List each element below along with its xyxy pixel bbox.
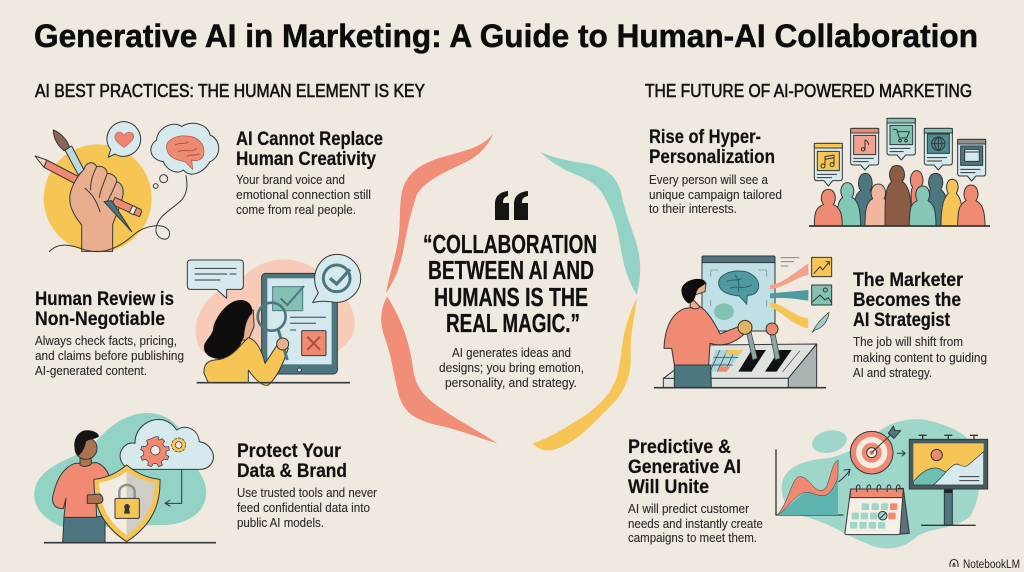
illustration: chart, target, calendar and billboard xyxy=(776,419,988,548)
text: protect your data and brand: Protect Your xyxy=(237,440,341,462)
illustration: hand with pencil and brush xyxy=(35,122,219,252)
text: AI cannot replace human creativity: come from real people. xyxy=(236,202,356,217)
quote text: REAL MAGIC.” xyxy=(446,310,580,338)
text: rise of hyper-personalization: to their interests. xyxy=(649,201,737,216)
quote subtext: designs; you bring emotion, xyxy=(439,360,584,375)
text: human review is non-negotiable: AI-generated content. xyxy=(35,363,147,378)
text: human review is non-negotiable: Non-Negotiable xyxy=(35,308,165,330)
text: human review is non-negotiable: Always check facts, pricing, xyxy=(35,333,177,348)
text: predictive and generative AI will unite xyxy=(628,436,763,545)
illustration: audience with personalised cards xyxy=(809,118,990,226)
text: rise of hyper-personalization: Every person will see a xyxy=(649,172,769,187)
quote subtext: AI generates ideas and xyxy=(452,345,571,360)
text: protect your data and brand: feed confidential data into xyxy=(237,500,370,515)
quote text: BETWEEN AI AND xyxy=(428,257,594,285)
text: predictive and generative AI will unite: AI will predict customer xyxy=(628,501,750,516)
illustration: woman reviewing tablet xyxy=(187,254,361,385)
heading: future of AI-powered marketing: THE FUTURE OF AI-POWERED MARKETING xyxy=(645,81,972,101)
text: predictive and generative AI will unite: Predictive & xyxy=(628,436,731,458)
text: the marketer becomes the AI strategist: The Marketer xyxy=(853,269,963,291)
text: predictive and generative AI will unite: Generative AI xyxy=(628,456,741,478)
text: protect your data and brand: Use trusted tools and never xyxy=(237,485,378,500)
text: the marketer becomes the AI strategist xyxy=(853,269,987,380)
text: the marketer becomes the AI strategist: AI and strategy. xyxy=(853,365,932,380)
panel: AI cannot replace human creativity xyxy=(35,122,383,252)
text: predictive and generative AI will unite: campaigns to meet them. xyxy=(628,530,757,545)
text: AI cannot replace human creativity xyxy=(236,128,383,217)
text: protect your data and brand xyxy=(237,440,378,530)
text: rise of hyper-personalization: Personalization xyxy=(649,146,775,168)
text: human review is non-negotiable: and claims before publishing xyxy=(35,348,184,363)
quote text xyxy=(423,231,597,338)
quote subtext: personality, and strategy. xyxy=(445,375,577,390)
heading: AI best practices: AI BEST PRACTICES: THE HUMAN ELEMENT IS KEY xyxy=(35,81,425,101)
text: the marketer becomes the AI strategist: The job will shift from xyxy=(853,334,963,349)
icon: quotation mark xyxy=(495,191,528,220)
text: predictive and generative AI will unite: Will Unite xyxy=(628,476,709,498)
text: rise of hyper-personalization: Rise of Hyper- xyxy=(649,126,761,148)
text: the marketer becomes the AI strategist: Becomes the xyxy=(853,289,961,311)
quote text: “COLLABORATION xyxy=(423,231,597,259)
panel: the marketer becomes the AI strategist xyxy=(654,256,987,388)
panel: human review is non-negotiable xyxy=(35,254,361,385)
text: predictive and generative AI will unite: needs and instantly create xyxy=(628,516,763,531)
ribbon frame xyxy=(381,133,640,450)
text: the marketer becomes the AI strategist: AI Strategist xyxy=(853,309,950,331)
panel: protect your data and brand xyxy=(34,413,378,543)
text: rise of hyper-personalization: unique campaign tailored xyxy=(649,187,782,202)
panel: rise of hyper-personalization xyxy=(649,118,990,226)
quote subtext xyxy=(439,345,584,390)
title: Generative AI in Marketing: A Guide to Human-AI Collaboration xyxy=(34,18,978,54)
text: human review is non-negotiable xyxy=(35,288,184,378)
illustration: person with shield and cloud xyxy=(34,413,216,543)
text: AI cannot replace human creativity: emotional connection still xyxy=(236,187,371,202)
text: the marketer becomes the AI strategist: making content to guiding xyxy=(853,350,987,365)
text: protect your data and brand: Data & Brand xyxy=(237,460,347,482)
panel: central quote xyxy=(381,133,640,450)
text: AI cannot replace human creativity: Human Creativity xyxy=(236,148,376,170)
illustration: marketer at console xyxy=(654,256,832,388)
quote text: HUMANS IS THE xyxy=(434,284,588,312)
panel: predictive and generative AI will unite xyxy=(628,419,988,548)
text: rise of hyper-personalization xyxy=(649,126,782,216)
text: protect your data and brand: public AI models. xyxy=(237,515,324,530)
text: human review is non-negotiable: Human Review is xyxy=(35,288,174,310)
text: AI cannot replace human creativity: AI Cannot Replace xyxy=(236,128,383,150)
text: AI cannot replace human creativity: Your brand voice and xyxy=(236,172,345,187)
